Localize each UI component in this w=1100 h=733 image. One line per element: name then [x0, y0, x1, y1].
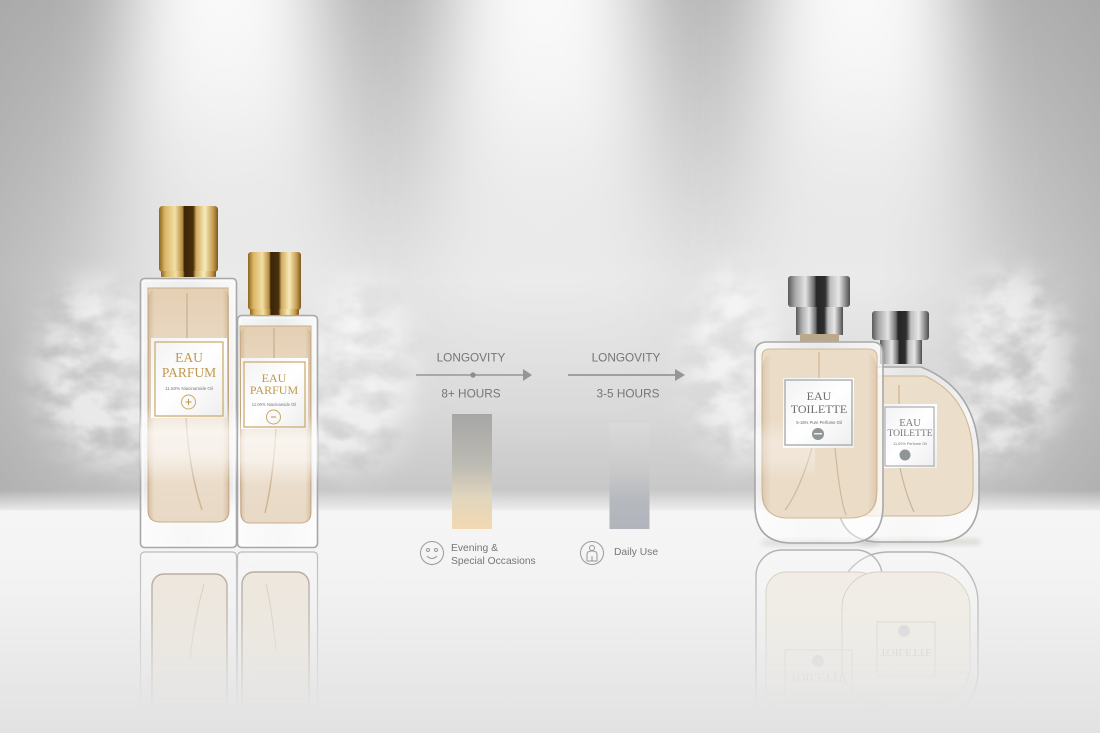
glass body	[755, 342, 883, 543]
heading: LONGOVITY	[437, 350, 506, 364]
heading: LONGOVITY	[592, 350, 661, 364]
mist band	[238, 415, 318, 485]
caption: daily use: Daily Use	[614, 547, 658, 558]
mist band	[755, 420, 815, 480]
hours: 3-5 HOURS	[597, 386, 660, 400]
gold cap	[159, 206, 218, 277]
silver cap	[788, 276, 850, 342]
background: wall	[0, 0, 1100, 510]
label: 5-15% Pure Perfume Oil	[796, 420, 842, 425]
label: EAU	[899, 418, 921, 429]
glass body	[140, 278, 236, 548]
label	[241, 358, 308, 429]
silver cap	[872, 311, 929, 364]
label: 11.00% Perfume Oil	[893, 442, 927, 446]
hours: 8+ HOURS	[441, 386, 501, 400]
bar: 8+ hours	[452, 414, 492, 529]
glass body	[238, 316, 318, 548]
reflection: eau parfum bottles	[140, 551, 318, 695]
smoke right	[688, 270, 1068, 465]
contact shadow	[762, 541, 878, 545]
longevity arrow left	[416, 350, 532, 400]
label: EAU	[175, 350, 203, 365]
caption: evening and special occasions: Evening &	[451, 543, 498, 554]
icon: smiling face	[420, 542, 444, 564]
reflection: eau toilette bottles: TOILETTE	[880, 646, 932, 658]
reflection: eau toilette bottles	[755, 549, 979, 688]
longevity arrow right	[568, 350, 685, 400]
label: 11.50% Niacinamide Oil	[165, 386, 213, 391]
bottle: large eau toilette	[755, 276, 883, 545]
gold cap	[248, 252, 301, 315]
label: PARFUM	[250, 383, 298, 397]
label: TOILETTE	[791, 402, 847, 416]
bottle: small eau toilette	[837, 311, 980, 544]
label	[783, 378, 854, 448]
label: EAU	[262, 371, 287, 385]
label: 11.00% Niacinamide Oil	[252, 402, 296, 407]
perfume liquid	[240, 326, 311, 523]
bar: 3-5 hours	[610, 423, 650, 529]
contact shadow	[860, 540, 980, 544]
label: EAU	[807, 389, 832, 403]
label: PARFUM	[162, 365, 216, 380]
round glass body	[837, 367, 979, 542]
perfume liquid	[840, 376, 973, 516]
perfume liquid	[148, 288, 229, 522]
label: TOILETTE	[887, 428, 933, 439]
bottle: large eau parfum	[140, 206, 237, 548]
caption: evening and special occasions: Special Occasions	[451, 556, 536, 567]
label	[151, 338, 227, 418]
reflection: eau toilette bottles: TOILETTE	[790, 671, 846, 685]
background: floor	[0, 490, 1100, 733]
smoke left	[37, 280, 412, 471]
label	[883, 404, 937, 468]
icon: person	[580, 542, 604, 564]
mist band	[140, 405, 237, 483]
perfume liquid	[762, 349, 877, 518]
bottle: small eau parfum	[238, 252, 318, 548]
